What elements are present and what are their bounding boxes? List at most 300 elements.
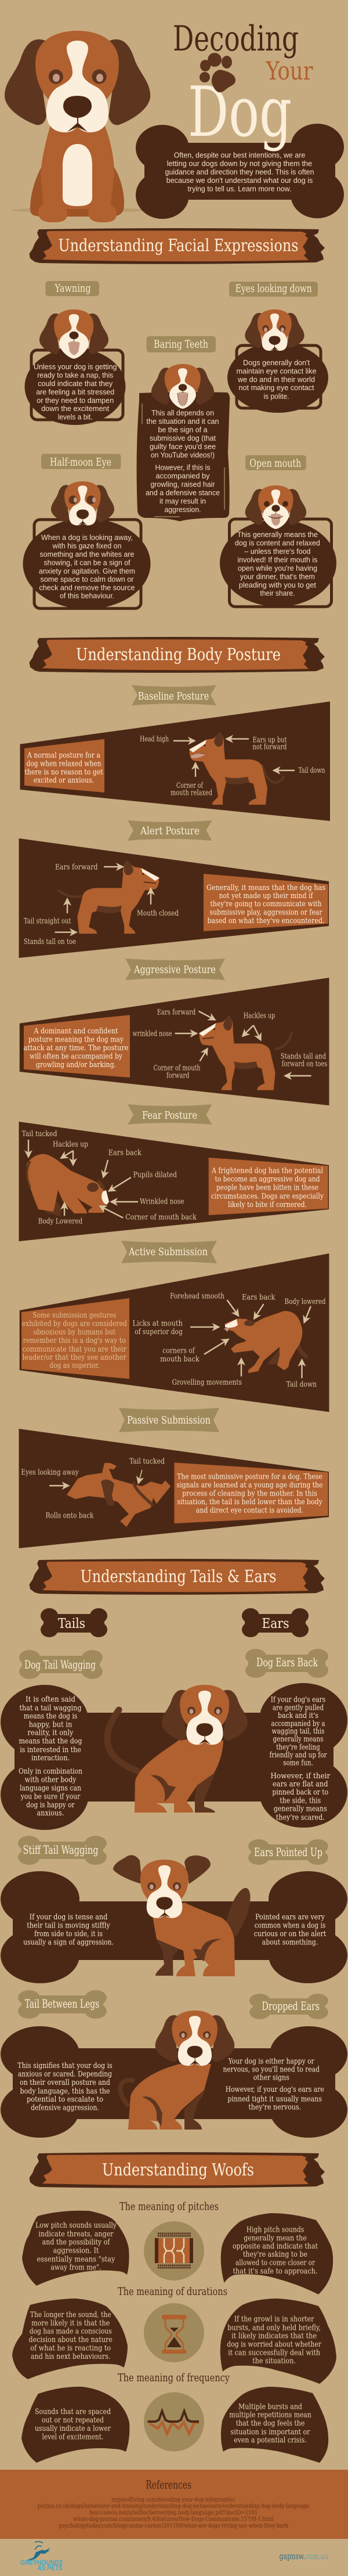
labels and arrows: aggressive: Hackles up [244, 1011, 275, 1021]
labels and arrows: aggressive: Ears forward [157, 1008, 196, 1017]
banner: woofs [29, 2152, 325, 2188]
bubble: spaced sounds: level of excitement. [42, 2433, 103, 2442]
callout: active submission: exhibited by dogs are considered [22, 1320, 127, 1328]
label bone: dog ears back [245, 1649, 328, 1678]
ribbon: fear posture [128, 1104, 212, 1125]
callout: baseline: A normal posture for a [27, 751, 100, 760]
text: ears back: friendly and up for [269, 1751, 327, 1760]
bubble: long sound: The longer the sound, the [30, 2311, 111, 2319]
labels and arrows: aggressive: forward [166, 1072, 190, 1080]
callout: fear: likely to bite if cornered. [228, 1201, 307, 1209]
label bone: dropped ears: Dropped Ears [262, 1999, 320, 2013]
panel: yawning [24, 281, 125, 425]
text: tail wagging: means that the dog [19, 1737, 82, 1746]
bubble: multiple bursts [221, 2387, 328, 2463]
bubble: short growl: bursts, and only held briefly, [227, 2323, 321, 2333]
text: yawning: or they need to dampen [37, 396, 114, 405]
dog head: half-moon eye [51, 481, 114, 525]
bubble: multiple bursts: multiple repetitions mean [229, 2411, 311, 2420]
panel: passive submission [19, 1429, 329, 1548]
bubble: multiple bursts: that the dog feels the [236, 2419, 304, 2428]
label: yawning: Yawning [55, 282, 91, 295]
panel: eyes looking down [227, 282, 328, 413]
bubble: multiple bursts: Multiple bursts and [238, 2402, 302, 2412]
labels and arrows: baseline: Tail down [298, 766, 325, 775]
label bone: stiff tail wagging: Stiff Tail Wagging [23, 1843, 99, 1857]
title: Your [266, 57, 313, 86]
text: yawning: could indicate that they [38, 379, 113, 388]
dog: tail between legs [120, 2011, 234, 2130]
text: eyes looking down: maintain eye contact like [237, 367, 317, 375]
text: dropped ears: Your dog is either happy or [228, 2058, 314, 2066]
dog: alert [58, 861, 160, 934]
text: half-moon eye: anxiety or agitation. Give them [39, 567, 135, 575]
labels and arrows: fear [22, 1130, 197, 1226]
dog head: eyes looking down [245, 309, 304, 351]
text: open mouth: their share. [260, 589, 295, 597]
labels and arrows: active submission: Grovelling movements [172, 1378, 242, 1387]
callout: aggressive: attack at any time. The posture [23, 1044, 129, 1053]
header illustration: sitting dog [5, 31, 150, 222]
reference list [38, 2496, 309, 2529]
bubble: high pitch: they're asking to be [243, 2250, 307, 2259]
banner: body posture [29, 637, 325, 673]
bubble: spaced sounds [21, 2387, 129, 2463]
text: ears back: If your dog's ears [271, 1695, 325, 1705]
icon: hourglass [144, 2303, 204, 2362]
bubble: low pitch: away from me". [51, 2263, 101, 2272]
title [173, 19, 313, 153]
text: stiff tail: usually a sign of aggression. [23, 1938, 114, 1947]
icon: paw [200, 53, 235, 92]
text: yawning: levels a bit. [58, 412, 93, 421]
labels and arrows: aggressive: forward on toes [282, 1060, 327, 1068]
labels and arrows: active submission: corners of [162, 1347, 195, 1355]
callout: fear: A frightened dog has the potential [211, 1167, 323, 1175]
labels and arrows: aggressive [132, 1008, 327, 1080]
bubble: long sound: dog has made a conscious [30, 2327, 112, 2336]
text: open mouth [235, 530, 320, 597]
text: dropped ears: other signs [253, 2074, 289, 2082]
callout: fear: circumstances. Dogs are especially [211, 1192, 324, 1201]
ribbon: active submission: Active Submission [128, 1246, 208, 1258]
text: ears back: accompanied by a [271, 1720, 325, 1728]
bubble: spaced sounds: out or not repeated [42, 2416, 104, 2424]
labels and arrows: passive submission: Eyes looking away [21, 1468, 79, 1477]
text: stiff tail [23, 1913, 114, 1947]
callout: fear [209, 1158, 328, 1215]
panel: row one bone [1, 1683, 347, 1830]
labels and arrows: active submission: Licks at mouth [132, 1319, 183, 1328]
callout: alert: based on what they've encountered. [208, 917, 325, 925]
intro text: trying to tell us. Learn more now. [188, 185, 291, 193]
dog: ears pointed up [113, 1855, 250, 1976]
text: ears back: the side, this [280, 1796, 321, 1806]
callout: active submission: remember this is a dog's way to [23, 1336, 126, 1345]
banner: tails and ears [29, 1559, 325, 1595]
text: half-moon eye [39, 533, 135, 600]
label bone: ears pointed up: Ears Pointed Up [254, 1846, 322, 1859]
panel: open mouth [220, 455, 336, 607]
bubble: short growl: it likely indicates that the [231, 2332, 317, 2341]
text: ears back: back and it's [278, 1712, 318, 1720]
banner: tails and ears: Understanding Tails & Ears [80, 1566, 276, 1586]
logo: greyhounds as pets: AS PETS [37, 2565, 63, 2572]
labels and arrows: fear: Tail tucked [22, 1130, 57, 1139]
text: yawning [34, 362, 117, 421]
text: half-moon eye: something and the whites are [39, 550, 135, 559]
label bone: dropped ears [249, 1994, 328, 2019]
callout: active submission: dog as superior. [49, 1361, 99, 1370]
text: yawning: are feeling a bit stressed [36, 388, 114, 396]
text: dropped ears: However, if your dog's ears are [226, 2085, 324, 2094]
text: half-moon eye: with his gaze fixed on [52, 541, 122, 550]
panel: baseline posture [20, 701, 330, 821]
text: ears back: some fun. [283, 1759, 313, 1767]
label: open mouth: Open mouth [249, 457, 301, 470]
text: ears back: are gently pulled [273, 1703, 324, 1713]
callout: active submission: leader/or that they see another [23, 1353, 126, 1362]
bubble: spaced sounds: usually indicate a lower [35, 2424, 111, 2433]
dog head: open mouth [245, 485, 306, 529]
label bone: dog tail wagging: Dog Tail Wagging [24, 1658, 96, 1671]
text: half-moon eye: check and remove the source [39, 583, 135, 592]
text: ears back: they're feeling [276, 1743, 320, 1752]
bubble: short growl: dog is worried about whether [227, 2340, 321, 2349]
callout: aggressive: will often be accompanied by [30, 1052, 122, 1061]
text: tail wagging: that a tail wagging [20, 1704, 82, 1713]
callout: aggressive [23, 1015, 130, 1078]
bubble: short growl [220, 2298, 336, 2384]
text: stiff tail: their tail is moving stiffly [27, 1922, 110, 1930]
labels and arrows: passive submission: Rolls onto back [45, 1512, 94, 1520]
text: eyes looking down: is polite. [263, 392, 289, 401]
text: tail wagging: It is often said [26, 1695, 76, 1704]
bubble: high pitch: High pitch sounds [246, 2226, 304, 2234]
label bone: tail between legs: Tail Between Legs [25, 1997, 99, 2011]
text: open mouth: open while you're having [238, 564, 317, 572]
callout: alert [204, 874, 328, 931]
text: tail wagging: dog is happy or [26, 1801, 75, 1810]
banner: body posture: Understanding Body Posture [76, 644, 281, 664]
panel: aggressive posture [20, 978, 329, 1105]
labels and arrows: active submission: Tail down [287, 1381, 317, 1389]
ribbon: aggressive posture [125, 959, 225, 980]
logo: greyhounds as pets [20, 2542, 63, 2572]
bubble: low pitch: aggression. It [53, 2247, 99, 2255]
text: ears back [269, 1695, 331, 1822]
small bone: ears: Ears [262, 1616, 289, 1631]
text: ears back: wagging tail, this [272, 1727, 324, 1736]
text: ears pointed up: about something. [262, 1938, 318, 1947]
labels and arrows: fear: Pupils dilated [133, 1170, 177, 1180]
callout: active submission: obnoxious by humans but [33, 1328, 116, 1336]
label bone: stiff tail wagging [18, 1836, 107, 1865]
callout: passive submission: process of cleaning by the mother. In this [182, 1490, 317, 1498]
text: tail wagging: is interested in the [20, 1746, 81, 1754]
bubble: long sound: more likely it is that the [31, 2319, 110, 2328]
label bone: dog ears back: Dog Ears Back [256, 1656, 318, 1669]
callout: active submission: Some submission gestures [32, 1311, 116, 1320]
labels and arrows: aggressive: wrinkled nose [132, 1030, 172, 1038]
text: ears back: generally means [273, 1735, 324, 1744]
callout: active submission: communicate that you are their [23, 1345, 126, 1354]
callout: baseline [24, 739, 104, 792]
bubble: multiple bursts: even a potential crisis. [234, 2436, 307, 2445]
text: ears back: ears are flat and [273, 1780, 328, 1789]
labels and arrows: fear: Wrinkled nose [140, 1197, 184, 1206]
text: baring teeth: However, if this is [155, 463, 211, 471]
text: yawning: Unless your dog is getting [34, 362, 117, 371]
frame: eyes looking down [227, 343, 328, 413]
text: open mouth: your dinner, that's them [240, 572, 315, 581]
text: dropped ears: they're nervous. [248, 2103, 301, 2112]
bubble: high pitch: allowed to come closer or [235, 2258, 315, 2268]
text: ears back: they're scared. [276, 1814, 325, 1822]
bubble: short growl: If the growl is in shorter [234, 2315, 314, 2323]
labels and arrows: alert: Mouth closed [137, 909, 179, 918]
text: ears back: generally means [274, 1804, 327, 1814]
panel: baring teeth [137, 336, 230, 521]
bubble: high pitch [221, 2213, 333, 2294]
text: eyes looking down: not making eye contact [239, 383, 314, 392]
text: ears back: pinned back or to [272, 1788, 328, 1797]
text: tail wagging: you be sure if your [20, 1793, 81, 1801]
text: tail between legs: on their overall posture and [20, 2078, 110, 2087]
text: stiff tail: If your dog is tense and [30, 1913, 108, 1922]
bubble: long sound [12, 2298, 128, 2379]
labels and arrows: fear: Corner of mouth back [125, 1213, 197, 1222]
text: tail between legs: defensive aggression. [31, 2104, 99, 2112]
ribbon: alert posture: Alert Posture [140, 826, 200, 837]
label bone: tail between legs [18, 1990, 107, 2019]
text: half-moon eye: some space to calm down or [41, 575, 134, 583]
text: open mouth: This generally means the [237, 530, 318, 539]
dog: baseline [189, 733, 284, 805]
text: tail wagging: anxious. [37, 1809, 64, 1818]
labels and arrows: active submission: Forehead smooth [170, 1292, 224, 1300]
callout: aggressive: posture meaning the dog may [28, 1036, 124, 1044]
banner: facial expressions [29, 228, 325, 264]
small bone: tails: Tails [58, 1616, 85, 1631]
text: baring teeth: This all depends on [151, 409, 214, 417]
frame: baring teeth [137, 392, 230, 521]
text: tail wagging: Only in combination [19, 1767, 82, 1776]
text: tail between legs: This signifies that your dog is [17, 2062, 113, 2070]
dog: fear [27, 1154, 109, 1216]
heading: durations: The meaning of durations [118, 2286, 227, 2298]
text: tail wagging: reality, it only [28, 1729, 74, 1737]
icon: frequency pulse [144, 2392, 204, 2451]
labels and arrows: alert: Tail straight out [24, 917, 71, 925]
logo: greyhounds as pets: GREYHOUNDS [20, 2560, 63, 2567]
panel: half-moon eye [23, 454, 151, 609]
banner: facial expressions: Understanding Facial Expressions [58, 236, 298, 255]
text: open mouth: dog is content and relaxed [235, 539, 320, 547]
callout: alert: not yet made up their mind if [219, 892, 314, 900]
dog: passive submission [67, 1463, 171, 1527]
bubble: long sound: and his next behaviours. [31, 2352, 110, 2361]
ribbon: active submission [121, 1241, 217, 1263]
text: ears back: However, if their [270, 1772, 331, 1781]
labels and arrows: aggressive: Corner of mouth [153, 1064, 201, 1073]
text: eyes looking down: we do and in their world [237, 375, 315, 384]
labels and arrows: passive submission [21, 1457, 165, 1520]
intro text: letting our dogs down by not giving them the [167, 159, 312, 168]
callout: aggressive: A dominant and confident [34, 1027, 118, 1036]
callout: passive submission: and direct eye contact is avoided. [196, 1506, 303, 1515]
labels and arrows: alert: Stands tall on toe [24, 938, 76, 946]
bubble: high pitch: generally mean the [244, 2234, 307, 2243]
label bone: dog tail wagging [19, 1650, 103, 1679]
text: tail wagging: means the dog is [24, 1712, 77, 1721]
bubble: low pitch: and the possibility of [42, 2238, 111, 2247]
text: ears pointed up: Pointed ears are very [255, 1913, 325, 1922]
dog: active submission [224, 1311, 307, 1373]
text: baring teeth: the situation and it can [146, 417, 219, 426]
label: half-moon eye: Half-moon Eye [50, 456, 111, 469]
bubble: low pitch: Low pitch sounds usually [35, 2221, 117, 2230]
labels and arrows: baseline: Ears up but [253, 736, 287, 744]
text: half-moon eye: When a dog is looking away, [41, 533, 133, 542]
text: ears pointed up: common when a dog is [255, 1922, 325, 1930]
reference list: psychologytoday.com/blog/canine-corner/201108/what-are-dogs-trying-say-when-they-bark [59, 2523, 289, 2529]
callout: alert: they're going to communicate with [210, 900, 322, 909]
text: baring teeth: and a defensive stance [146, 488, 220, 497]
label: yawning [45, 281, 99, 296]
labels and arrows: active submission: mouth back [160, 1355, 200, 1364]
callout: alert: submissive play, aggression or fear [210, 908, 322, 917]
bubble: multiple bursts: situation is important or [231, 2428, 310, 2437]
text: open mouth: involved! If their mouth is [237, 555, 318, 564]
text: baring teeth: growling, raised hair [151, 480, 215, 489]
callout: fear: people have been bitten in these [216, 1183, 318, 1192]
website: gapnsw.com.au [280, 2551, 329, 2561]
frame: yawning [24, 348, 125, 425]
labels and arrows: baseline: Corner of [176, 781, 204, 790]
labels and arrows: baseline [140, 735, 325, 798]
bubble: long sound: decision about the nature [29, 2336, 113, 2344]
label: eyes looking down: Eyes looking down [235, 282, 312, 295]
banner: woofs: Understanding Woofs [102, 2160, 254, 2179]
text: baring teeth: submissive dog (that [150, 434, 216, 442]
reference list: hssv.convio.net/site/DocServer/dog.body.language.pdf?docID=1101 [89, 2510, 258, 2516]
callout: alert: Generally, it means that the dog has [206, 884, 325, 892]
labels and arrows: alert [24, 863, 179, 946]
bubble: short growl: the situation. [252, 2357, 296, 2365]
icon: pitch [144, 2221, 204, 2280]
text: yawning: ready to take a nap, this [37, 370, 114, 380]
text: tail wagging [19, 1695, 82, 1818]
title: Decoding [173, 19, 299, 59]
bubble: low pitch: indicate threats, anger [38, 2230, 114, 2239]
ribbon: baseline posture: Baseline Posture [138, 691, 209, 702]
frame: half-moon eye [23, 518, 151, 609]
dog: tail wagging [107, 1685, 248, 1813]
labels and arrows: fear: Ears back [108, 1148, 142, 1158]
text: half-moon eye: showing, it can be a sign of [44, 559, 130, 567]
ribbon: baseline posture [132, 685, 216, 705]
label: baring teeth: Baring Teeth [154, 338, 208, 351]
panel: fear posture [19, 1122, 329, 1241]
reference list: whole-dog-journal.com/issues/9.4/features/How-Dogs-Communicate.15798-1.html [73, 2516, 274, 2523]
text: half-moon eye: of this behaviour. [60, 591, 114, 600]
bubble: low pitch [22, 2211, 129, 2286]
text: eyes looking down [237, 358, 317, 401]
callout: active submission [21, 1298, 129, 1379]
text: tail between legs: potential to escalate to [27, 2095, 103, 2104]
small bone: ears [242, 1608, 309, 1637]
heading: frequency: The meaning of frequency [118, 2372, 230, 2384]
callout: baseline: there is no reason to get [24, 768, 103, 777]
text: dropped ears: nervous, so you'll need to read [223, 2066, 320, 2074]
ribbon: aggressive posture: Aggressive Posture [133, 964, 216, 976]
text: stiff tail: from side to side, it is [34, 1930, 103, 1939]
text: ears pointed up [254, 1913, 326, 1947]
intro text [165, 151, 314, 193]
dog head: baring teeth [151, 364, 214, 409]
reference list: myjoyofliving.com/decoding-your-dog-infographic/ [111, 2496, 236, 2503]
text: baring teeth: guilty face you'd see [150, 442, 216, 451]
text: baring teeth: it may result in [160, 497, 206, 505]
labels and arrows: baseline: not forward [253, 743, 287, 751]
callout: passive submission: The most submissive posture for a dog. These [177, 1472, 322, 1482]
dog: aggressive [199, 1016, 292, 1090]
text: open mouth: pleading with you to get [239, 581, 316, 589]
callout: passive submission: situation, the tail is held lower than the body [177, 1498, 322, 1507]
bubble: high pitch: opposite and indicate that [233, 2242, 318, 2251]
labels and arrows: alert: Ears forward [55, 863, 98, 872]
bubble: short growl: it can successfully deal with [228, 2349, 321, 2357]
text: baring teeth: aggression. [165, 505, 201, 514]
heading: pitches: The meaning of pitches [119, 2201, 219, 2213]
callout: passive submission: signals are learned at a young age during the [176, 1481, 323, 1490]
ribbon: fear posture: Fear Posture [142, 1110, 197, 1122]
panel: row two bone [1, 1855, 347, 1983]
bubble: long sound: of what he is reacting to [30, 2344, 111, 2352]
bubble: high pitch: that it's safe to approach. [233, 2267, 318, 2276]
heading: references: References [146, 2478, 191, 2492]
frame: open mouth [220, 519, 336, 607]
label: baring teeth [147, 336, 216, 352]
labels and arrows: baseline: mouth relaxed [171, 788, 212, 798]
callout: fear: to become an aggressive dog and [215, 1175, 320, 1184]
panel: row three bone [1, 2011, 347, 2138]
ribbon: passive submission [119, 1408, 219, 1432]
labels and arrows: active submission [132, 1292, 326, 1389]
dog head: yawning [39, 309, 108, 359]
reference list: purina.co.uk/dogs/behaviour-and-training/understanding-dog-behaviours/understanding-dog-body-language [38, 2503, 309, 2509]
text: tail wagging: language signs can [20, 1784, 81, 1793]
text: tail wagging: interaction. [31, 1754, 70, 1763]
intro bone [136, 124, 344, 219]
text: tail wagging: happy, but in [29, 1721, 72, 1729]
panel: active submission [20, 1253, 329, 1412]
text: ears pointed up: curious or on the alert [254, 1930, 326, 1939]
labels and arrows: fear: Body Lowered [38, 1217, 83, 1226]
labels and arrows: passive submission: Tail tucked [129, 1457, 165, 1466]
text: baring teeth: be the sign of a [158, 425, 208, 434]
text: dropped ears [223, 2058, 324, 2112]
labels and arrows: aggressive: Stands tall and [281, 1052, 327, 1061]
text: tail between legs [17, 2062, 113, 2112]
text: eyes looking down: Dogs generally don't [243, 358, 310, 367]
callout: passive submission [174, 1462, 328, 1523]
text: tail between legs: anxious or scared. Depending [18, 2070, 112, 2078]
labels and arrows: active submission: Body lowered [284, 1298, 326, 1306]
text: dropped ears: pinned tight it usually means [227, 2095, 322, 2104]
ribbon: alert posture [128, 820, 212, 841]
